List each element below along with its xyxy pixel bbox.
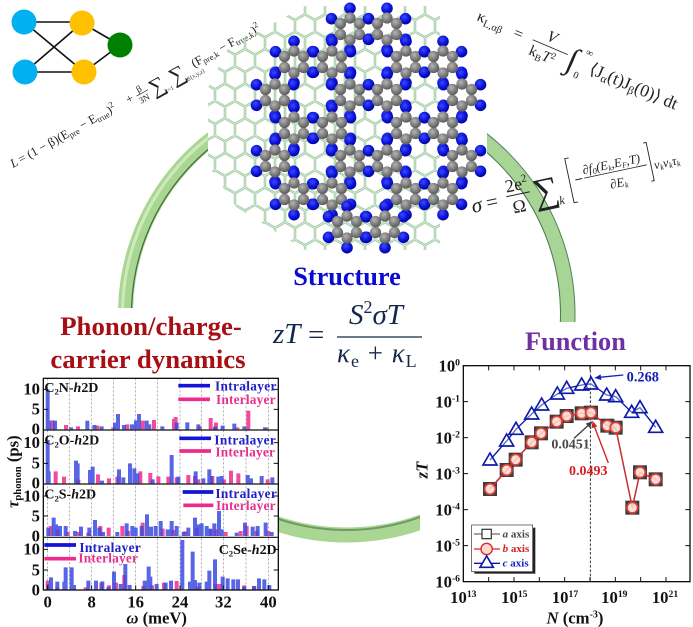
legends: Interlayer (216, 392, 276, 407)
annotation: 0.0493 (569, 421, 608, 479)
equation: lattice thermal conductivity: L,αβ (481, 19, 504, 36)
equation: electrical conductivity: 2e (503, 173, 524, 197)
panel titles: 2 (229, 549, 233, 559)
equation: electrical conductivity: = (484, 189, 500, 215)
x tick labels: 10 (501, 588, 518, 607)
equation: loss function: − E (74, 111, 100, 134)
heading: Function: Function (525, 327, 626, 356)
annotation: 0.0493: 0.0493 (569, 464, 607, 479)
equation: electrical conductivity (466, 135, 685, 226)
green ring: right arc (487, 133, 576, 322)
equation: loss function: i∈(x,y,z) (184, 68, 206, 84)
equation: electrical conductivity: 0 (592, 165, 599, 176)
chart: zT versus carrier concentration (412, 357, 690, 627)
panel titles: C (219, 543, 229, 558)
equation: loss function: (F (189, 53, 205, 70)
legends: Interlayer (216, 498, 276, 513)
y tick labels: 10 (435, 464, 452, 483)
equation: electrical conductivity: k (558, 193, 567, 208)
equation: loss function (5, 17, 266, 178)
equation: electrical conductivity: k (676, 159, 682, 168)
equation: lattice thermal conductivity: ⟨J (587, 58, 607, 82)
panel titles: C (44, 381, 54, 396)
equation: zT formula: σT (372, 299, 405, 331)
equation: electrical conductivity: F (620, 160, 628, 170)
equation: zT formula: κ (392, 338, 406, 368)
x tick labels: 10 (601, 588, 618, 607)
equation: loss function: = (1 − β)(E (16, 127, 71, 166)
equation: lattice thermal conductivity: β (625, 84, 636, 98)
x tick labels: 10 (450, 588, 467, 607)
chart: phonon lifetime panels (3, 378, 278, 627)
y tick labels: 10 (435, 500, 452, 519)
equation: loss function: 2 (107, 99, 115, 110)
equation: lattice thermal conductivity: (0)⟩ dt (632, 77, 681, 114)
equation: loss function: 3N (137, 91, 152, 106)
equation: zT formula: zT (272, 318, 302, 350)
equation: electrical conductivity: v (653, 157, 661, 172)
panel titles: Se- (233, 543, 252, 558)
y tick labels: 5 (32, 506, 40, 525)
equation: lattice thermal conductivity: 2 (549, 52, 558, 63)
x tick labels: 10 (552, 588, 568, 607)
heading: Structure: Structure (293, 262, 401, 291)
equation: loss function: pre (67, 126, 82, 140)
y tick labels: -6 (452, 573, 460, 584)
equation: loss function: ) (248, 23, 259, 37)
atomic structure: C2N lattice (251, 2, 486, 254)
panel frames and ticks (43, 378, 278, 590)
icon: neural network (12, 10, 132, 84)
equation: electrical conductivity: 2 (520, 172, 528, 185)
y tick labels: 10 (435, 392, 452, 411)
y tick labels: 0 (32, 474, 40, 493)
y tick labels: 5 (32, 400, 40, 419)
y tick labels: 10 (435, 428, 452, 447)
y tick labels: 10 (435, 572, 452, 591)
equation: loss function: pre,k (201, 48, 221, 66)
y tick labels: -5 (452, 537, 460, 548)
x tick labels (450, 588, 678, 607)
x tick labels: 10 (652, 588, 668, 607)
equation: electrical conductivity: Ω (511, 195, 528, 217)
equation: loss function: true,k (234, 29, 256, 48)
equation: zT formula: + (360, 338, 392, 368)
dashed grid (48, 378, 268, 590)
y tick labels (435, 357, 460, 591)
panel: C2S-h2D bars (48, 511, 272, 536)
legends: Intralayer (79, 540, 141, 555)
honeycomb substrate (205, 5, 445, 253)
y tick labels: -2 (452, 429, 460, 440)
equation: zT formula: κ (337, 338, 351, 368)
y tick labels: 5 (32, 454, 40, 473)
y tick labels: 10 (23, 433, 40, 452)
y tick labels: 10 (23, 380, 40, 399)
legends: Intralayer (215, 486, 277, 501)
equation: electrical conductivity: σ (469, 192, 486, 218)
panel titles: h2D (74, 381, 98, 396)
equation: lattice thermal conductivity: B (532, 53, 542, 65)
equation: electrical conductivity: (E (595, 158, 609, 174)
equation: lattice thermal conductivity: V (544, 28, 562, 48)
y tick labels: 10 (435, 536, 452, 555)
panel titles: h2D (252, 543, 277, 558)
equation: electrical conductivity: ∂E (608, 174, 626, 192)
y tick labels: 0 (455, 358, 460, 369)
panel: C2N-h2D bars (48, 389, 267, 429)
equation: loss function: ) (104, 103, 115, 117)
y axis title: (ps) (3, 435, 22, 466)
equation: loss function: ∑ (164, 60, 190, 89)
panel titles: N- (59, 381, 74, 396)
equation: lattice thermal conductivity: ∞ (584, 47, 595, 60)
green ring: left arc (118, 132, 208, 308)
equation: electrical conductivity: k (624, 180, 630, 190)
heading: Phonon/charge-carrier dynamics: Phonon/charge- (60, 311, 242, 341)
axes frame (463, 366, 690, 582)
annotation: 0.0451 (551, 421, 593, 453)
legend: a axis (503, 528, 529, 540)
y tick labels: 10 (23, 540, 40, 559)
panel titles (44, 381, 277, 559)
y tick labels (23, 380, 40, 599)
series: c axis (483, 377, 663, 465)
equation: lattice thermal conductivity: α (598, 73, 609, 86)
series: a axis (484, 407, 661, 513)
x tick labels: 15 (518, 589, 528, 600)
equation: loss function: + (123, 91, 136, 107)
x tick labels: 17 (568, 589, 578, 600)
heading: Phonon/charge-carrier dynamics: carrier dynamics (50, 344, 246, 374)
y axis title: zT (412, 461, 431, 479)
x tick labels: 0 (44, 592, 52, 611)
y tick labels: -3 (452, 465, 460, 476)
panel: C2O-h2D bars (48, 440, 272, 483)
x tick labels: 13 (467, 589, 477, 600)
equation: lattice thermal conductivity: k (526, 43, 539, 61)
y tick labels: 10 (23, 486, 40, 505)
equation: loss function: − F (214, 34, 238, 57)
panel titles: h2D (71, 488, 96, 503)
panel titles: S- (59, 488, 72, 503)
equation: loss function: ∑ (144, 71, 170, 100)
equation: loss function: 2 (251, 19, 260, 30)
axis ticks (463, 366, 690, 582)
legends (44, 379, 277, 566)
y tick labels: 5 (32, 560, 40, 579)
panel titles: C (44, 434, 54, 449)
equation: electrical conductivity: ,E (609, 155, 623, 171)
x axis title: -3 (590, 610, 598, 621)
equation: zT formula: e (351, 351, 360, 371)
equation: electrical conductivity: k (607, 163, 613, 173)
legend (472, 525, 535, 574)
equation: lattice thermal conductivity: = (511, 25, 526, 44)
x axis title: ω (meV) (126, 608, 187, 627)
dashed reference line (589, 366, 592, 582)
x tick labels: 16 (127, 592, 144, 611)
equation: lattice thermal conductivity: κ (474, 8, 489, 27)
panel titles: 2 (54, 387, 59, 397)
y tick labels: -1 (452, 393, 460, 404)
panel titles: h2D (74, 434, 99, 449)
y tick labels: -4 (452, 501, 460, 512)
annotation: 0.268 (594, 369, 659, 385)
equation: electrical conductivity: ∑ (529, 168, 562, 213)
y tick labels: 0 (32, 580, 40, 599)
equation: zT formula (272, 297, 422, 371)
panel titles: 2 (54, 439, 59, 449)
annotation: 0.0451: 0.0451 (551, 438, 590, 453)
annotation: 0.268: 0.268 (627, 369, 659, 385)
equation: loss function: true (95, 109, 112, 124)
equation: loss function: L (7, 155, 21, 171)
equation: zT formula: L (406, 351, 418, 371)
y tick labels: 10 (439, 357, 455, 376)
legends: Intralayer (214, 433, 276, 448)
x tick labels (44, 592, 277, 611)
equation: lattice thermal conductivity (469, 0, 685, 122)
panel titles: O- (59, 434, 75, 449)
equation: loss function: β (135, 84, 144, 95)
panel titles: 2 (54, 493, 59, 503)
equation: zT formula: S (349, 299, 364, 331)
legend: c axis (503, 558, 529, 570)
x tick labels: 32 (215, 592, 232, 611)
equation: electrical conductivity: v (662, 155, 670, 170)
panel: C2Se-h2D bars (48, 540, 269, 590)
green ring: bottom arc (279, 514, 420, 542)
legends: Interlayer (215, 445, 275, 460)
legend: b axis (503, 543, 529, 555)
equation: lattice thermal conductivity: (t)J (605, 66, 634, 94)
y tick labels: 0 (32, 526, 40, 545)
equation: zT formula: = (308, 319, 324, 351)
equation: electrical conductivity: k (659, 162, 665, 172)
equation: lattice thermal conductivity: T (539, 48, 554, 67)
equation: zT formula: 2 (364, 297, 372, 317)
equation: electrical conductivity: τ (670, 154, 678, 168)
equation: lattice thermal conductivity: ∫ (559, 40, 586, 80)
equation: loss function: k=1 (164, 85, 175, 95)
equation: electrical conductivity: k (668, 160, 674, 170)
series: b axis (485, 407, 661, 513)
y tick labels: 0 (32, 420, 40, 439)
panel titles: C (44, 488, 54, 503)
x tick labels: 21 (668, 589, 678, 600)
x tick labels: 24 (172, 592, 189, 611)
equation: electrical conductivity: ∂f (581, 161, 593, 177)
y axis title: phonon (13, 466, 24, 501)
equation: electrical conductivity: ,T) (625, 151, 641, 168)
legends: Intralayer (215, 379, 277, 394)
x tick labels: 8 (88, 592, 96, 611)
legends: Interlayer (78, 551, 138, 566)
x tick labels: 19 (618, 589, 628, 600)
equation: lattice thermal conductivity: 0 (571, 70, 580, 82)
x tick labels: 40 (260, 592, 277, 611)
y axis title: τ (3, 500, 22, 508)
